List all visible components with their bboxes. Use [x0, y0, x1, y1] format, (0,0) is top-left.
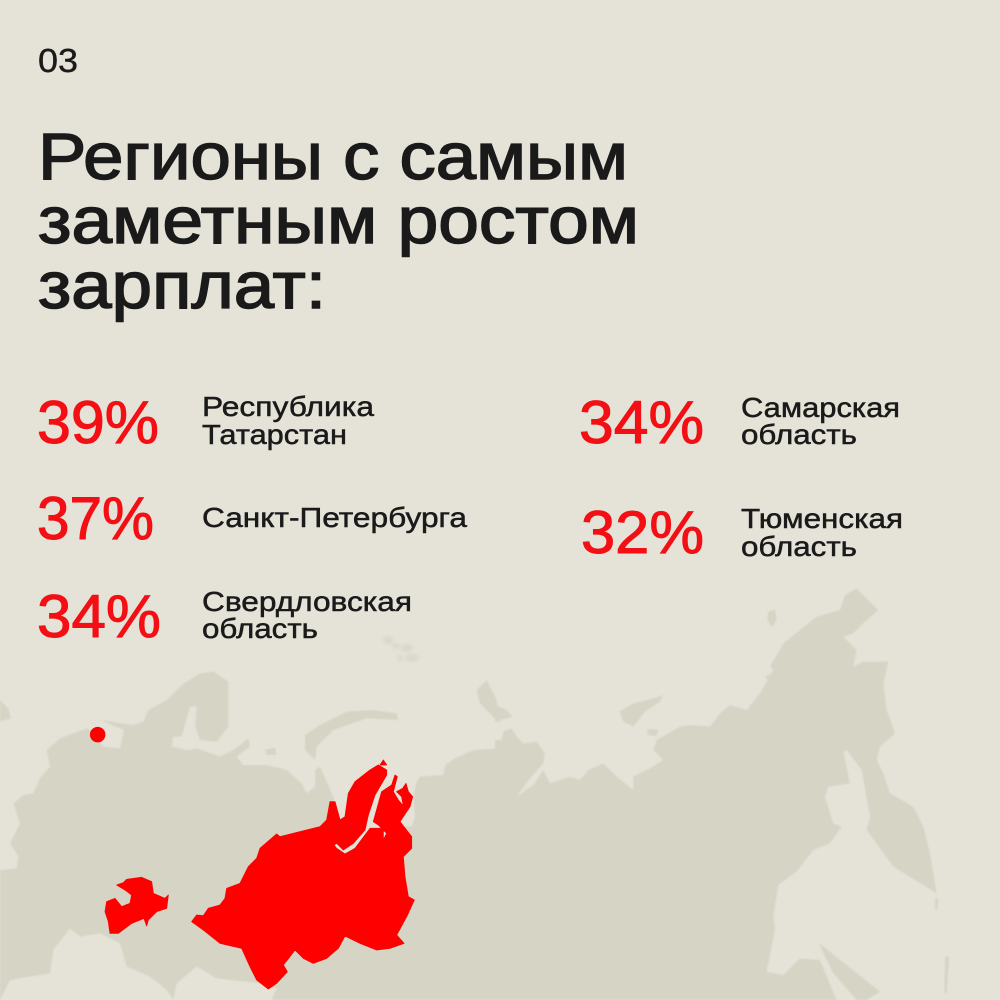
stat: Saint Petersburg: Санкт-Петербурга	[202, 502, 467, 533]
stat: Sverdlovsk: область	[202, 613, 318, 644]
stat: Tatarstan	[37, 389, 374, 456]
Ayon Island	[765, 672, 783, 681]
Kuril sliver	[935, 898, 938, 910]
slide number: 03	[38, 42, 78, 79]
western land mass	[0, 672, 503, 1000]
stat: Saint Petersburg: 37%	[37, 485, 154, 552]
stat: Sverdlovsk	[37, 583, 412, 650]
Kuril sliver south	[944, 957, 949, 993]
stat: Tyumen: Тюменская	[741, 503, 903, 534]
eastern land mass	[495, 588, 949, 1000]
stat: Tatarstan: Республика	[202, 391, 374, 422]
Franz Josef Land	[477, 680, 500, 723]
map of Russia	[0, 588, 949, 1000]
small lake	[265, 747, 277, 755]
title: зарплат:	[38, 248, 326, 322]
title	[38, 119, 639, 322]
Novaya Zemlya	[305, 710, 398, 760]
region: Tatarstan and Samara	[105, 877, 168, 933]
stat: Samara: 34%	[579, 389, 704, 456]
region: Urals Federal District area	[192, 765, 414, 989]
stat: Samara: Самарская	[741, 392, 900, 423]
stat: Samara	[579, 389, 900, 456]
region: Yamal tip	[380, 760, 387, 765]
title: Регионы с самым	[38, 119, 628, 193]
stat: Saint Petersburg	[37, 485, 467, 552]
stat: Tyumen: область	[741, 531, 857, 562]
title: заметным ростом	[38, 183, 639, 257]
stat: Sverdlovsk: 34%	[37, 583, 161, 650]
stat: Tatarstan: 39%	[37, 389, 159, 456]
stat: Tyumen: 32%	[581, 499, 704, 566]
Sakhalin	[818, 943, 880, 1000]
stat: Tatarstan: Татарстан	[202, 419, 347, 450]
Wrangel Island	[767, 609, 777, 627]
highlighted regions	[90, 727, 414, 989]
stat: Tyumen	[581, 499, 903, 566]
New Siberian Islands	[619, 695, 663, 727]
region: Saint Petersburg dot	[90, 727, 105, 742]
Scandinavian fragment	[0, 700, 11, 722]
Arctic archipelago	[383, 636, 419, 662]
frozen gulf under the highlighted region	[333, 765, 412, 858]
stat: Sverdlovsk: Свердловская	[202, 586, 412, 617]
stat: Samara: область	[741, 419, 857, 450]
Taimyr islands	[495, 705, 513, 722]
